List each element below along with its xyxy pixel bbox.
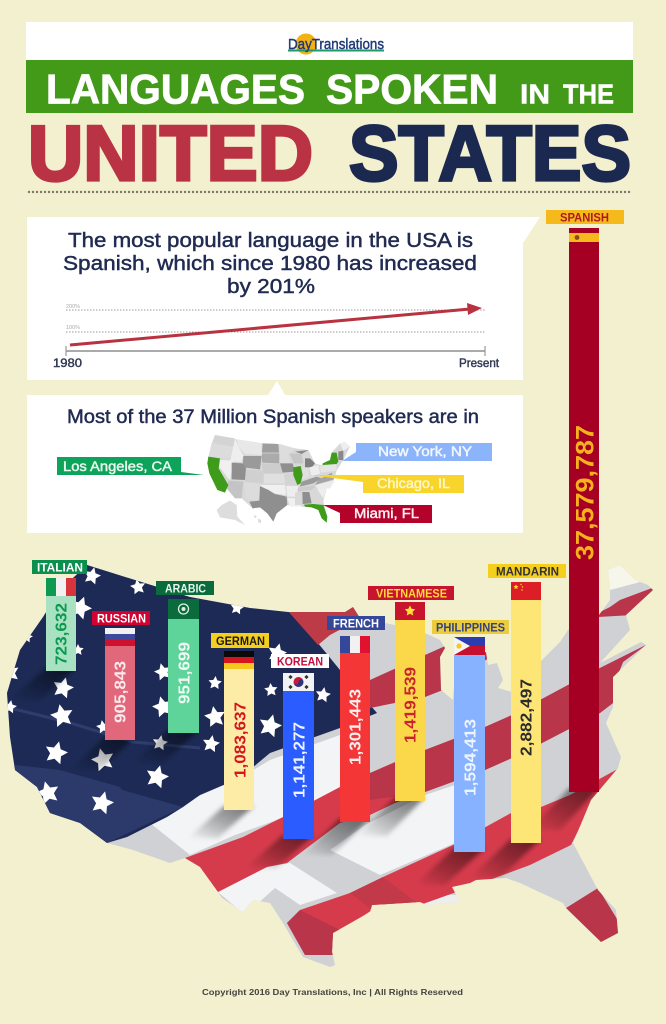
callout: Chicago	[310, 475, 464, 493]
logo: Day Translations: DayTranslations	[288, 36, 384, 53]
flag: China	[511, 582, 541, 600]
title: languages spoken in the: THE	[563, 78, 614, 110]
bar: Philippines: 1,594,413	[462, 719, 480, 796]
bar: Italian: 723,632	[54, 603, 70, 665]
callout: Los Angeles	[57, 457, 204, 475]
navy canton	[7, 565, 377, 843]
label: Mandarin: MANDARIN	[496, 566, 559, 578]
label: Arabic: ARABIC	[165, 584, 206, 596]
label: French	[327, 616, 385, 630]
bar: German: 1,083,637	[232, 702, 250, 778]
line chart: 1980 to present: Present	[459, 356, 500, 370]
bar: Korean	[271, 654, 329, 839]
title: united states: UNITED	[28, 109, 313, 197]
flag: Italy	[46, 578, 76, 596]
callout: Miami: Miami, FL	[354, 506, 420, 521]
bar: Russian: 905,843	[112, 661, 130, 723]
bar: Spanish	[546, 210, 624, 792]
title: languages spoken in the: LANGUAGES	[46, 66, 305, 112]
bar shadows	[10, 668, 599, 885]
label: Philippines: PHILIPPINES	[436, 622, 505, 634]
bar: Arabic	[156, 581, 214, 733]
title: united states: STATES	[349, 109, 631, 197]
header banner	[26, 22, 633, 60]
label: German: GERMAN	[216, 636, 265, 648]
title: languages spoken in the: SPOKEN	[326, 66, 498, 112]
flag: Germany	[224, 651, 254, 669]
heading: most popular language: The most popular language in the USA is	[68, 230, 473, 252]
flag: Spain	[569, 233, 599, 242]
bar: Russian	[92, 611, 150, 740]
bar: Philippines	[432, 620, 509, 852]
panel: spanish speaker cities	[27, 381, 523, 533]
bar: French: 1,301,443	[348, 689, 364, 765]
line chart: 1980 to present: 100%	[66, 325, 80, 331]
mini US map	[207, 435, 350, 525]
heading: most popular language	[63, 230, 477, 298]
bar: Korean: 1,141,277	[292, 722, 308, 798]
bar: Spanish: 37,579,787	[572, 425, 600, 560]
bar: Arabic: 951,699	[176, 642, 194, 704]
highlighted states	[207, 453, 338, 523]
callout: Chicago: Chicago, IL	[377, 476, 451, 491]
title: languages spoken in the	[26, 60, 633, 113]
callout: Los Angeles: Los Angeles, CA	[63, 459, 172, 474]
label: Vietnamese: VIETNAMESE	[376, 588, 447, 600]
line chart: 1980 to present	[53, 303, 500, 370]
label: Russian: RUSSIAN	[97, 614, 146, 626]
red stripes	[288, 607, 359, 645]
bar: Vietnamese	[368, 586, 454, 801]
bar: Mandarin	[488, 564, 566, 843]
copyright: Copyright 2016 Day Translations, Inc | All Rights Reserved	[202, 987, 463, 997]
label: Italian: ITALIAN	[37, 562, 83, 574]
flag: France	[340, 636, 370, 653]
white stripes	[150, 735, 340, 855]
panel: spanish growth	[27, 217, 540, 380]
label: Spanish	[546, 210, 624, 224]
label: Mandarin	[488, 564, 566, 578]
callout: Miami	[323, 505, 432, 523]
arrow: growth trend	[70, 303, 482, 345]
line chart: 1980 to present: 200%	[66, 304, 80, 310]
bar: German	[211, 633, 269, 810]
label: Korean: KOREAN	[277, 656, 323, 668]
bar: Mandarin: 2,882,497	[518, 679, 536, 756]
heading: most of the 37 million: Most of the 37 Million Spanish speakers are in	[67, 407, 479, 428]
bar: Vietnamese: 1,419,539	[402, 667, 420, 743]
heading: most popular language: Spanish, which since 1980 has increased	[63, 253, 477, 275]
callout: New York: New York, NY	[378, 444, 472, 459]
label: French: FRENCH	[333, 618, 379, 630]
US map with flag pattern	[7, 565, 653, 967]
title: languages spoken in the: IN	[520, 78, 550, 110]
line chart: 1980 to present: 1980	[53, 356, 82, 370]
flag: Philippines	[454, 637, 485, 655]
bar: French	[327, 616, 385, 822]
label: Arabic	[156, 581, 214, 596]
callout: New York	[342, 443, 492, 461]
title: united states	[28, 109, 631, 197]
label: Spanish: SPANISH	[560, 212, 609, 224]
flag: South Korea	[283, 673, 314, 691]
flag: Russia	[105, 628, 135, 646]
stars	[0, 565, 332, 815]
heading: most popular language: by 201%	[227, 276, 315, 298]
bar: Italian	[32, 560, 87, 671]
flag: Arab League	[168, 599, 199, 619]
flag: Vietnam	[395, 602, 425, 620]
